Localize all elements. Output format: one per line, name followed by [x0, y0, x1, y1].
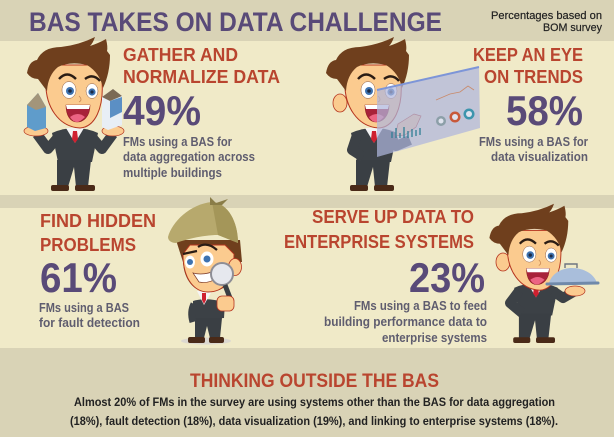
icon: businessman with serving tray: [489, 204, 598, 343]
heading: GATHER AND: [123, 45, 238, 65]
panel: keep an eye on trends: [326, 37, 588, 191]
description: FMs using a BAS for: [123, 135, 232, 149]
panel: thinking outside the BAS: [70, 371, 558, 428]
heading: SERVE UP DATA TO: [312, 207, 474, 227]
description: [123, 135, 255, 180]
icon: businessman with holographic dashboard: [326, 37, 480, 191]
percentage: 61%: [40, 254, 117, 301]
heading: ON TRENDS: [484, 67, 583, 87]
heading: [123, 45, 280, 87]
heading: KEEP AN EYE: [473, 45, 583, 65]
description: [479, 135, 588, 164]
description: multiple buildings: [123, 166, 222, 180]
body text: (18%), fault detection (18%), data visualization (19%), and linking to enterprise systems (18%).: [70, 414, 558, 428]
description: FMs using a BAS for: [479, 135, 588, 149]
heading: ENTERPRISE SYSTEMS: [284, 232, 474, 252]
description: [39, 301, 140, 330]
body text: [70, 395, 558, 428]
heading: FIND HIDDEN: [40, 211, 156, 231]
header band: [0, 0, 614, 41]
heading: [473, 45, 583, 87]
survey note: BOM survey: [543, 22, 602, 34]
description: FMs using a BAS: [39, 301, 129, 315]
body text: Almost 20% of FMs in the survey are using systems other than the BAS for data aggregation: [74, 395, 555, 409]
divider band: [0, 195, 614, 208]
survey note: [491, 10, 602, 34]
title: BAS TAKES ON DATA CHALLENGE: [29, 7, 442, 37]
heading: THINKING OUTSIDE THE BAS: [190, 371, 439, 392]
description: enterprise systems: [382, 331, 487, 345]
footer band: [0, 348, 614, 437]
description: [324, 299, 487, 345]
percentage: 23%: [409, 254, 485, 301]
percentage: 49%: [123, 87, 201, 134]
heading: PROBLEMS: [40, 235, 136, 255]
panel: find hidden problems: [39, 197, 242, 344]
description: FMs using a BAS to feed: [354, 299, 487, 313]
survey note: Percentages based on: [491, 10, 602, 22]
description: data visualization: [491, 150, 588, 164]
panel: serve up data to enterprise systems: [284, 204, 598, 345]
description: building performance data to: [324, 315, 487, 329]
icon: businessman holding buildings: [24, 37, 124, 191]
heading: [284, 207, 474, 252]
icon: detective with magnifying glass: [168, 197, 242, 344]
description: data aggregation across: [123, 150, 255, 164]
percentage: 58%: [506, 87, 583, 134]
description: for fault detection: [39, 316, 140, 330]
panel: gather and normalize data: [24, 37, 280, 191]
heading: [40, 211, 156, 255]
heading: NORMALIZE DATA: [123, 67, 280, 87]
